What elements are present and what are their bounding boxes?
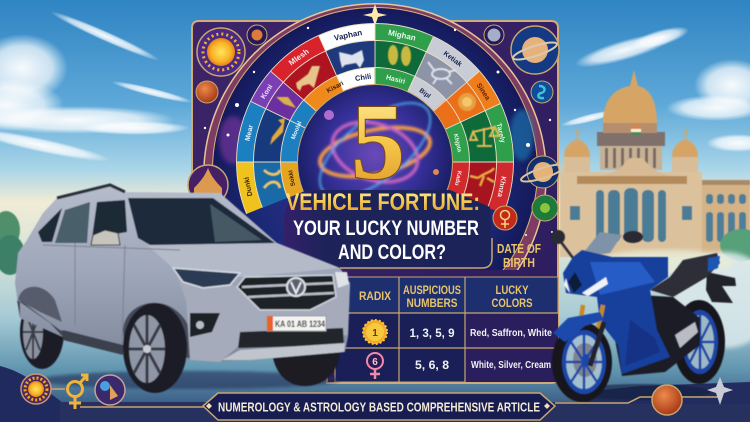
taurus <box>339 50 364 68</box>
windscreen <box>580 232 622 257</box>
upper fairing <box>563 250 670 374</box>
header row: LUCKY <box>496 285 529 297</box>
door seams <box>43 243 180 345</box>
front wheel <box>552 322 612 402</box>
row 1 <box>363 320 552 344</box>
wheel sign labels: Koni <box>260 84 274 100</box>
rear wheel <box>673 300 725 384</box>
pisces <box>264 170 280 188</box>
side mirror <box>91 230 120 245</box>
front wheel <box>123 303 187 393</box>
corner: venus planet <box>196 81 218 103</box>
table <box>335 277 558 382</box>
motorcycle <box>551 230 736 402</box>
right front tyre <box>273 352 340 386</box>
fog lamp <box>190 313 220 337</box>
sagittarius <box>276 97 296 108</box>
zodiac icons <box>264 45 499 188</box>
row 2: White, Silver, Cream <box>471 360 551 371</box>
car body <box>15 185 350 362</box>
wheel sign labels: Vaphan <box>333 28 363 43</box>
wheel sign labels: Khnza <box>496 176 507 198</box>
arch star <box>363 4 387 26</box>
corner: saturn <box>511 26 559 74</box>
front fender and fork leg <box>553 312 604 342</box>
wheel sign labels: Hasiri <box>385 74 406 86</box>
wheel sign labels: Moolal <box>291 120 304 140</box>
lower bumper trim <box>222 343 345 360</box>
cancer <box>428 62 456 84</box>
row 2: 5, 6, 8 <box>415 358 449 372</box>
row 1: Red, Saffron, White <box>470 328 552 339</box>
wheel sign labels: Ketiak <box>442 50 463 69</box>
side towers <box>564 130 590 157</box>
lower saturn <box>520 156 566 188</box>
left connector line <box>50 389 205 407</box>
title <box>286 189 480 264</box>
capricorn <box>270 118 285 145</box>
wheel sign labels: Mlesh <box>287 47 311 68</box>
flag <box>631 126 641 135</box>
stars <box>204 27 553 236</box>
arch <box>203 3 546 270</box>
icon: sun medallion <box>21 374 51 404</box>
header row: AUSPICIOUS <box>403 285 461 297</box>
engine and swingarm <box>615 295 700 376</box>
right headlight <box>335 272 349 288</box>
mirrors <box>551 230 643 258</box>
green planet <box>532 195 558 221</box>
bumper front <box>175 270 350 362</box>
right tree and mist <box>595 229 750 348</box>
hood <box>147 243 340 277</box>
portico <box>560 172 702 257</box>
clouds <box>0 7 750 167</box>
big number five: 5 <box>351 83 405 202</box>
wheel sign labels: Mear <box>245 124 255 142</box>
fork <box>580 305 603 330</box>
wheel sign labels: Khjpta <box>452 133 462 154</box>
corner: sun <box>197 28 245 76</box>
row 2 <box>367 353 551 379</box>
corner: small orange planet <box>247 25 267 45</box>
bike shadow <box>570 384 710 400</box>
date of birth label <box>497 242 541 270</box>
sparkle star <box>707 377 733 405</box>
title: AND COLOR? <box>338 241 446 264</box>
right wing <box>700 184 750 254</box>
windshield <box>128 198 275 245</box>
side windows <box>38 200 127 243</box>
wheel sign labels: Dunki <box>244 176 254 197</box>
wheel sign labels: Bipl <box>418 87 432 100</box>
title box border <box>340 238 492 268</box>
title: YOUR LUCKY NUMBER <box>293 217 479 240</box>
left tree <box>0 211 25 275</box>
licence plate <box>267 316 326 331</box>
roof rail <box>57 185 125 198</box>
header row: NUMBERS <box>406 298 458 310</box>
header row: COLORS <box>492 298 533 310</box>
icon: blue and gold sign medallion <box>95 375 125 405</box>
gemini <box>388 45 411 66</box>
wheel sign labels: Kisari <box>326 80 345 95</box>
header row <box>359 285 533 310</box>
lower cladding <box>17 300 123 353</box>
footer banner: NUMEROLOGY & ASTROLOGY BASED COMPREHENSIVE ARTICLE <box>218 400 540 414</box>
wheel sign labels: Tarely <box>495 123 506 144</box>
panel: astrology board <box>188 0 566 383</box>
car: silver SUV <box>15 185 350 393</box>
red planet icon <box>652 385 682 415</box>
header row: RADIX <box>359 291 391 303</box>
headlight <box>582 277 608 296</box>
corner: temple medallion <box>188 165 228 205</box>
lower grille <box>238 328 344 348</box>
wheel sign labels: Mighan <box>387 28 417 43</box>
title box <box>284 190 492 268</box>
connector line <box>555 397 720 403</box>
headlight <box>173 268 240 288</box>
seat <box>650 253 720 297</box>
icon: gender symbol <box>68 375 87 409</box>
rear wheel <box>20 295 64 369</box>
venus symbol <box>493 206 517 230</box>
building <box>560 70 750 257</box>
libra <box>470 127 499 146</box>
car shadow <box>40 371 340 389</box>
row 1: 1 <box>372 328 378 339</box>
wheel sign labels: Kadu <box>453 170 462 186</box>
center galaxy <box>298 84 452 240</box>
licence plate: KA 01 AB 1234 <box>275 319 325 329</box>
aries <box>296 66 320 91</box>
leo <box>458 93 476 111</box>
wheel sign labels: Sinea <box>475 82 491 102</box>
scorpio <box>470 168 494 186</box>
corner: blue swirl planet <box>531 81 553 103</box>
zodiac wheel <box>192 0 558 345</box>
wheel sign labels: Sokki <box>288 169 297 186</box>
date of birth label: DATE OF <box>497 242 541 256</box>
tail hugger and plate <box>706 272 736 303</box>
ground <box>0 366 750 422</box>
corner: grey moon <box>484 25 504 45</box>
grille <box>237 275 336 310</box>
wheel sign labels: Chili <box>354 72 372 83</box>
wheel sign labels <box>244 28 507 198</box>
row 1: 1, 3, 5, 9 <box>410 326 455 340</box>
footer banner <box>203 393 555 420</box>
main dome <box>603 70 657 124</box>
date of birth label: BIRTH <box>503 256 535 270</box>
row 2: 6 <box>372 357 378 368</box>
title: VEHICLE FORTUNE: <box>286 189 480 216</box>
